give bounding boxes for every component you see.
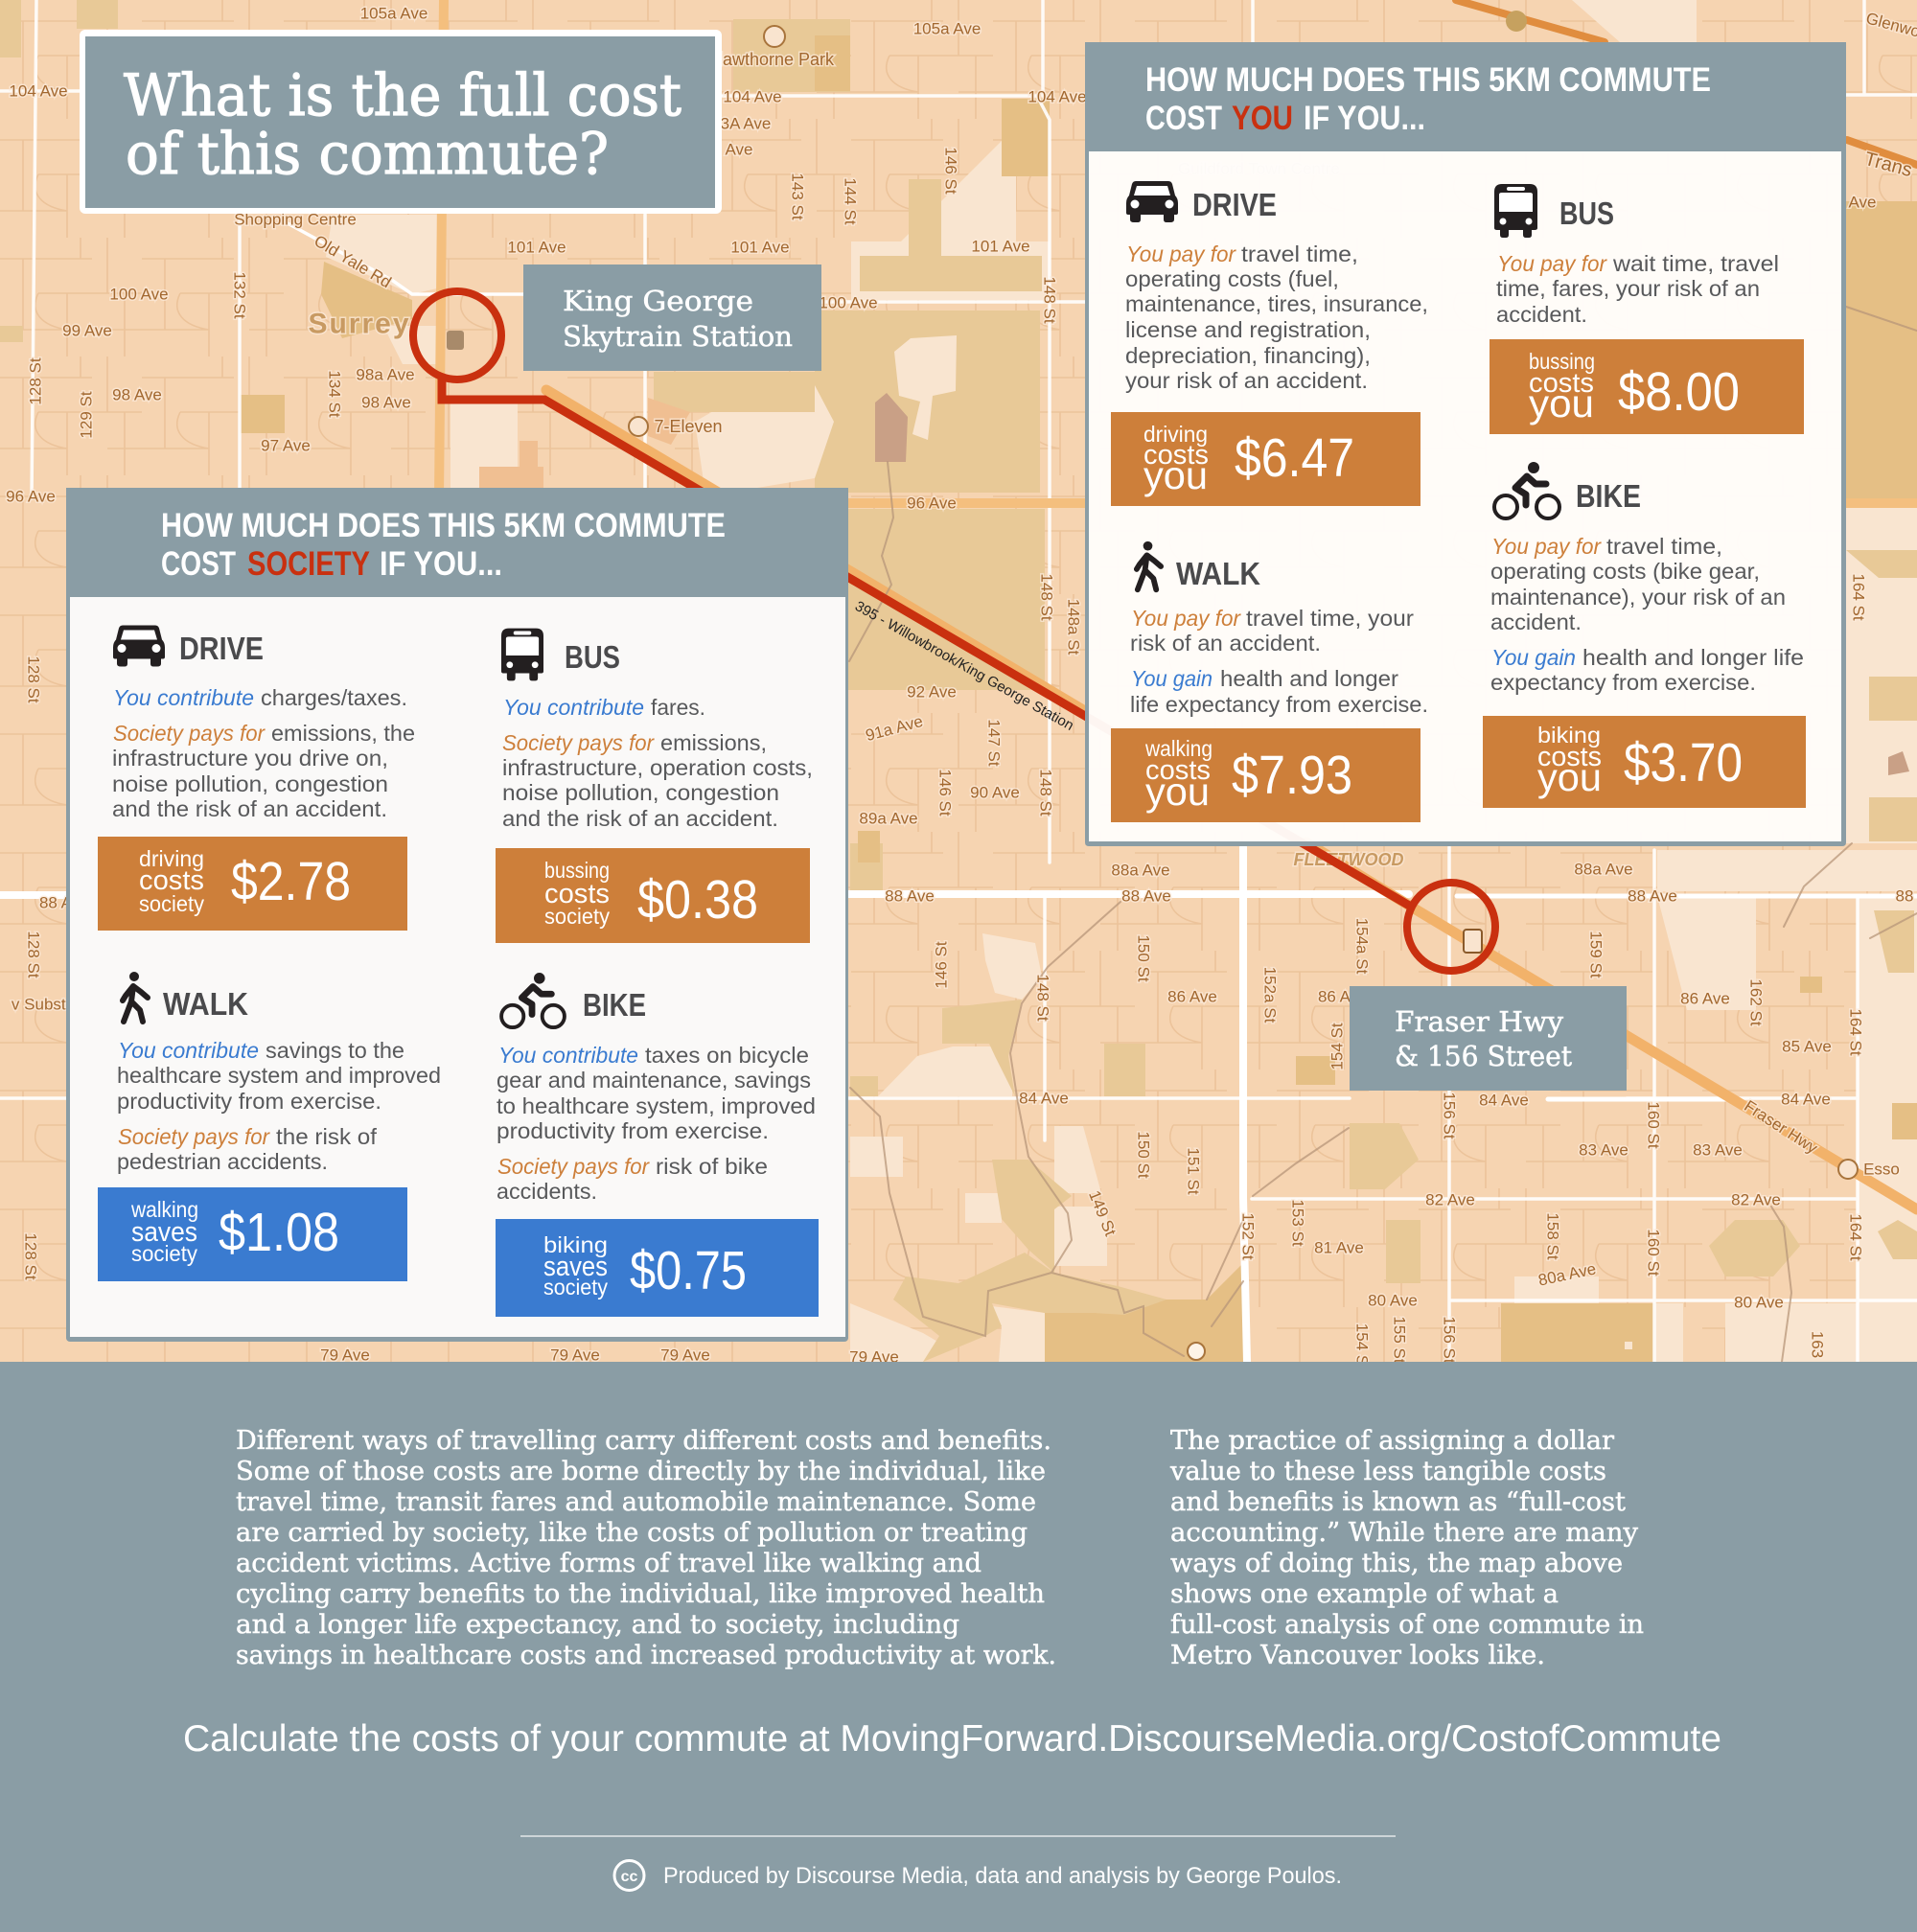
map labels: 154 S xyxy=(1353,1323,1371,1366)
explanatory text: left column: are carried by society, like the costs of pollution or treating xyxy=(236,1518,1028,1548)
label: Fraser Hwy and 156 Street xyxy=(1350,986,1627,1091)
you: drive: operating costs (fuel, xyxy=(1125,266,1339,291)
map labels: 98 Ave xyxy=(361,393,411,412)
map labels: 153 St xyxy=(1288,1199,1307,1247)
map labels: 156 St xyxy=(1440,1092,1459,1139)
society: bus: BUS xyxy=(565,639,620,675)
society: walk: Society pays for xyxy=(118,1124,270,1149)
heading: society xyxy=(161,507,726,583)
map labels: 144 St xyxy=(842,177,859,225)
start marker circle xyxy=(413,291,501,380)
map labels: 160 St xyxy=(1645,1101,1662,1149)
map labels: 148 St xyxy=(1041,276,1058,324)
you: bus: BUS xyxy=(1559,196,1614,231)
explanatory text: left column: and a longer life expectancy, and to society, including xyxy=(236,1610,959,1640)
society: bus: Society pays for xyxy=(502,730,655,755)
map labels: 100 Ave xyxy=(109,286,169,303)
map labels: 159 St xyxy=(1587,931,1605,978)
map labels: Ave xyxy=(1848,194,1877,211)
you: walk: You pay for xyxy=(1131,606,1241,631)
map labels: 80 Ave xyxy=(311,1294,360,1313)
map labels: 96 Ave xyxy=(907,494,957,512)
panel: cost to society xyxy=(66,488,848,1342)
label: Fraser Hwy and 156 Street: & 156 Street xyxy=(1395,1040,1572,1072)
you: bike: expectancy from exercise. xyxy=(1490,670,1756,695)
cost box: biking costs you: $3.70 xyxy=(1624,732,1743,794)
map labels: 148 St xyxy=(1037,573,1056,621)
explanatory text: right column: Metro Vancouver looks like. xyxy=(1170,1641,1545,1670)
society: bike: risk of bike xyxy=(656,1154,768,1179)
society: bike: taxes on bicycle xyxy=(645,1043,809,1068)
heading: society: COST xyxy=(161,545,236,583)
map labels: 91a Ave xyxy=(864,712,925,745)
explanatory text: left column: accident victims. Active forms of travel like walking and xyxy=(236,1549,982,1578)
map labels: FLEETWOOD xyxy=(1294,850,1403,869)
map labels: 82 Ave xyxy=(1425,1190,1475,1209)
map labels: Ave xyxy=(725,140,753,159)
explanatory text: left column: cycling carry benefits to the individual, like improved health xyxy=(236,1579,1045,1609)
you: walk: travel time, your xyxy=(1246,606,1414,631)
map labels: 88 Ave xyxy=(1121,887,1171,905)
saving box: biking saves society: saves xyxy=(543,1252,608,1282)
map labels: lawthorne Park xyxy=(719,50,835,69)
map labels: 154a St xyxy=(1353,918,1371,975)
map labels: 164 St xyxy=(1850,573,1867,621)
society: drive: noise pollution, congestion xyxy=(112,771,388,796)
map labels: 151 St xyxy=(1185,1147,1202,1195)
map labels: 84 Ave xyxy=(1479,1091,1529,1110)
society: bus: and the risk of an accident. xyxy=(502,806,778,831)
map labels: 150 St xyxy=(1135,1131,1152,1179)
cost box: driving costs society: society xyxy=(139,891,204,916)
saving box: biking saves society: biking xyxy=(543,1232,608,1257)
cost box: biking costs you: biking xyxy=(1537,723,1601,748)
you: bike xyxy=(1483,462,1806,808)
society: walk: productivity from exercise. xyxy=(117,1089,381,1114)
map labels: Esso xyxy=(1863,1160,1900,1179)
map background xyxy=(0,0,1917,1367)
saving box: biking saves society: $0.75 xyxy=(630,1240,747,1301)
cost box: walking costs you: you xyxy=(1145,770,1210,814)
map labels: 128 St xyxy=(27,357,44,405)
map labels: 89a Ave xyxy=(859,809,918,828)
you: bike: operating costs (bike gear, xyxy=(1490,559,1760,584)
heading: society: HOW MUCH DOES THIS 5KM COMMUTE xyxy=(161,507,726,544)
explanatory text: right column: and benefits is known as “full-cost xyxy=(1170,1487,1626,1517)
map labels: 99 Ave xyxy=(62,322,112,339)
explanatory text: right column: shows one example of what a xyxy=(1170,1579,1559,1609)
map labels: 134 St xyxy=(326,370,343,418)
cost box: bussing costs society: costs xyxy=(544,879,610,909)
map labels: 128 St xyxy=(25,656,42,703)
society: bus xyxy=(496,629,813,943)
you: walk xyxy=(1111,541,1428,822)
map labels: 97 Ave xyxy=(261,437,311,454)
saving box: walking saves society: society xyxy=(131,1241,197,1266)
map labels: Guildford Town Centre xyxy=(1178,159,1340,178)
call to action: Calculate the costs of your commute at MovingForward.DiscourseMedia.org/CostofCommute xyxy=(183,1718,1721,1760)
cost box: driving costs society: driving xyxy=(139,846,204,871)
you: walk: health and longer xyxy=(1220,666,1398,691)
map labels: 83 Ave xyxy=(1693,1140,1743,1160)
you: bus: accident. xyxy=(1496,302,1587,327)
map labels: 85 Ave xyxy=(1782,1037,1832,1056)
map labels: 90 Ave xyxy=(970,784,1020,801)
you: drive xyxy=(1111,181,1428,506)
map labels: 100 Ave xyxy=(819,293,878,312)
title: What is the full cost xyxy=(124,62,681,129)
society: bus: infrastructure, operation costs, xyxy=(502,755,813,780)
title: of this commute? xyxy=(126,121,609,188)
you: bus: wait time, travel xyxy=(1612,251,1779,276)
map labels: 162 St xyxy=(1746,978,1766,1026)
map labels: Old Yale Rd xyxy=(311,232,395,291)
cost box: bussing costs society: bussing xyxy=(544,858,610,883)
cost box: walking costs you: walking xyxy=(1144,736,1213,761)
society: walk xyxy=(98,972,441,1281)
map labels: Trans xyxy=(1862,149,1914,181)
icon: creative commons: cc xyxy=(621,1869,638,1885)
you: drive: license and registration, xyxy=(1125,317,1371,342)
cost box: walking costs you: costs xyxy=(1145,755,1211,786)
you: walk: risk of an accident. xyxy=(1130,631,1321,656)
end marker circle xyxy=(1407,883,1495,971)
cost box: driving costs society: costs xyxy=(139,865,204,896)
map labels: 128 St xyxy=(25,931,42,978)
heading: you xyxy=(1145,61,1711,137)
cost box: walking costs you: $7.93 xyxy=(1232,745,1352,806)
saving box: biking saves society xyxy=(496,1219,819,1317)
society: walk: WALK xyxy=(163,986,248,1022)
map labels: Shopping Centre xyxy=(234,211,357,228)
society: bike: accidents. xyxy=(497,1179,597,1204)
label: King George Skytrain Station: King George xyxy=(563,285,753,317)
you: walk: WALK xyxy=(1176,556,1260,591)
cost box: driving costs society xyxy=(98,837,407,931)
map labels: 98 Ave xyxy=(112,385,162,404)
you: bus: You pay for xyxy=(1497,251,1607,276)
society: walk: the risk of xyxy=(276,1124,378,1149)
map labels: 160 St xyxy=(1645,1229,1662,1276)
map labels: 146 St xyxy=(932,941,951,989)
map labels: 101 Ave xyxy=(971,238,1030,255)
you: drive: DRIVE xyxy=(1192,187,1277,222)
society: bike: Society pays for xyxy=(497,1154,650,1179)
map labels: 128 St xyxy=(21,1232,40,1280)
society: drive: Society pays for xyxy=(113,721,266,746)
society: bike: to healthcare system, improved xyxy=(497,1093,816,1118)
society: walk: pedestrian accidents. xyxy=(117,1149,328,1174)
heading: you: HOW MUCH DOES THIS 5KM COMMUTE xyxy=(1145,61,1711,99)
map labels: 79 Ave xyxy=(660,1346,710,1365)
map labels: 105a Ave xyxy=(360,4,427,23)
map labels: 84 Ave xyxy=(1019,1089,1069,1108)
map labels: 152 St xyxy=(1238,1212,1258,1260)
map labels: 150 St xyxy=(1135,934,1152,982)
label: King George Skytrain Station xyxy=(523,264,821,371)
society: walk: savings to the xyxy=(266,1038,404,1063)
map labels: 101 Ave xyxy=(507,238,566,257)
explanatory text: left column xyxy=(236,1426,1056,1670)
footer band xyxy=(0,1362,1917,1932)
society: bike: BIKE xyxy=(583,987,646,1023)
explanatory text: left column: savings in healthcare costs and increased productivity at work. xyxy=(236,1641,1056,1670)
map labels: 163 xyxy=(1808,1331,1827,1358)
society: drive xyxy=(98,625,415,931)
society: bike: productivity from exercise. xyxy=(497,1118,769,1143)
commute route line xyxy=(442,379,1411,907)
map labels: 88 Ave xyxy=(885,887,935,905)
you: drive: depreciation, financing), xyxy=(1125,343,1371,368)
map labels: 80 Ave xyxy=(109,1294,159,1313)
cost box: driving costs you: you xyxy=(1143,453,1208,497)
society: bus: You contribute xyxy=(503,695,644,720)
explanatory text: right column: ways of doing this, the map above xyxy=(1170,1549,1623,1578)
heading: you: COST xyxy=(1145,100,1222,137)
map labels: 129 St xyxy=(77,391,96,439)
map labels: 88a Ave xyxy=(1111,861,1170,880)
map labels: 96 Ave xyxy=(6,487,56,506)
explanatory text: right column xyxy=(1169,1426,1644,1670)
explanatory text: left column: Different ways of travelling carry different costs and benefits. xyxy=(236,1426,1051,1456)
cost box: driving costs you: costs xyxy=(1143,440,1209,471)
map labels: 155 St xyxy=(1390,1316,1409,1364)
cost box: walking costs you xyxy=(1111,728,1420,822)
map labels: 146 St xyxy=(935,769,955,816)
heading: you: YOU xyxy=(1232,100,1293,137)
society: drive: infrastructure you drive on, xyxy=(112,746,388,770)
society: walk: healthcare system and improved xyxy=(117,1063,441,1088)
society: bike: You contribute xyxy=(498,1043,638,1068)
map labels: v Substa xyxy=(12,995,76,1014)
you: bus: time, fares, your risk of an xyxy=(1496,276,1760,301)
map labels: 154 St xyxy=(1328,1023,1346,1070)
cost box: biking costs you xyxy=(1483,716,1806,808)
society: walk: You contribute xyxy=(118,1038,259,1063)
you: drive: your risk of an accident. xyxy=(1125,368,1368,393)
map labels: 79 Ave xyxy=(550,1346,600,1365)
map labels: 148 St xyxy=(1037,769,1054,816)
you: bike: You pay for xyxy=(1491,534,1602,559)
map labels: Fraser Hwy xyxy=(1741,1096,1821,1158)
map labels: 148 St xyxy=(1033,974,1052,1022)
map labels: 152a St xyxy=(1261,967,1279,1024)
label: Fraser Hwy and 156 Street: Fraser Hwy xyxy=(1395,1005,1564,1038)
map labels: 88 xyxy=(1896,887,1913,905)
map labels: 164 St xyxy=(1846,1008,1865,1056)
label: King George Skytrain Station: Skytrain Station xyxy=(563,320,793,353)
map labels: 149 St xyxy=(1085,1188,1120,1239)
map labels xyxy=(6,4,1917,1367)
cost box: bussing costs you: costs xyxy=(1529,368,1594,399)
map labels: 92 Ave xyxy=(907,682,957,702)
map labels: 143 St xyxy=(788,172,807,220)
cost box: bussing costs you: bussing xyxy=(1529,349,1595,374)
society: drive: emissions, the xyxy=(271,721,415,746)
you: drive: You pay for xyxy=(1126,242,1236,266)
cost box: driving costs you: $6.47 xyxy=(1235,427,1354,489)
map labels: 158 St xyxy=(1543,1212,1562,1260)
society: drive: and the risk of an accident. xyxy=(112,796,387,821)
cost box: bussing costs you: $8.00 xyxy=(1618,361,1740,423)
map labels: 88 Ave xyxy=(1628,887,1677,905)
you: bike: accident. xyxy=(1490,610,1582,634)
map labels: 86 Ave xyxy=(1680,989,1730,1008)
map labels: 7-Eleven xyxy=(654,417,723,436)
explanatory text: right column: accounting.” While there are many xyxy=(1170,1518,1639,1548)
cost box: driving costs you: driving xyxy=(1143,422,1208,447)
map labels: 84 Ave xyxy=(1781,1091,1831,1108)
map labels: 146 St xyxy=(941,147,960,195)
cost box: driving costs you xyxy=(1111,412,1420,506)
map labels: 80a Ave xyxy=(1536,1259,1598,1290)
saving box: walking saves society: walking xyxy=(130,1197,198,1222)
saving box: walking saves society: saves xyxy=(131,1217,197,1248)
you: bike: health and longer life xyxy=(1582,645,1804,670)
map labels: 132 St xyxy=(230,271,249,319)
saving box: biking saves society: society xyxy=(543,1275,608,1300)
map labels: 164 St xyxy=(1846,1213,1865,1261)
you: drive: maintenance, tires, insurance, xyxy=(1125,291,1428,316)
map labels: 156 St xyxy=(1440,1316,1459,1364)
map markers xyxy=(447,11,1858,1360)
heading: society: IF YOU... xyxy=(380,545,502,583)
title xyxy=(80,30,722,214)
map labels: 80 Ave xyxy=(1734,1294,1784,1311)
cost box: driving costs society: $2.78 xyxy=(231,851,351,912)
map labels: 147 St xyxy=(985,719,1003,767)
icon: creative commons xyxy=(614,1861,644,1890)
society: bus: noise pollution, congestion xyxy=(502,780,779,805)
map labels: 79 Ave xyxy=(849,1347,899,1367)
society: bike: gear and maintenance, savings xyxy=(497,1068,811,1092)
society: bus: emissions, xyxy=(660,730,767,755)
map labels: 3A Ave xyxy=(721,115,771,132)
map labels: 79 Ave xyxy=(320,1346,370,1365)
map labels: 88 A xyxy=(39,893,73,912)
heading: society: SOCIETY xyxy=(247,545,370,583)
map labels: 80 Ave xyxy=(1368,1292,1418,1309)
explanatory text: right column: full-cost analysis of one commute in xyxy=(1170,1610,1644,1640)
map labels: 86 A xyxy=(1318,987,1351,1006)
you: bike: travel time, xyxy=(1606,534,1722,559)
map labels: 101 Ave xyxy=(730,238,790,257)
cost box: bussing costs society: society xyxy=(544,904,610,929)
society: bus: fares. xyxy=(651,695,705,720)
you: bus xyxy=(1490,184,1804,434)
credit: Produced by Discourse Media, data and analysis by George Poulos. xyxy=(663,1863,1342,1889)
panel: cost to you xyxy=(1085,42,1846,846)
society: drive: charges/taxes. xyxy=(261,685,407,710)
map labels: 98a Ave xyxy=(356,366,415,383)
society: bike xyxy=(496,973,819,1317)
you: walk: You gain xyxy=(1131,666,1213,691)
cost box: biking costs you: you xyxy=(1537,755,1602,799)
you: bike: maintenance), your risk of an xyxy=(1490,585,1786,610)
you: bike: BIKE xyxy=(1576,478,1641,514)
map labels: Surrey xyxy=(308,309,411,339)
cost box: bussing costs you xyxy=(1490,339,1804,434)
saving box: walking saves society: $1.08 xyxy=(219,1202,339,1263)
explanatory text: left column: Some of those costs are borne directly by the individual, like xyxy=(236,1457,1046,1486)
cost box: bussing costs you: you xyxy=(1529,381,1594,426)
map labels: 83 Ave xyxy=(1579,1140,1628,1160)
society: drive: You contribute xyxy=(113,685,254,710)
explanatory text: right column: value to these less tangible costs xyxy=(1169,1457,1606,1486)
you: walk: life expectancy from exercise. xyxy=(1130,692,1428,717)
map labels: 148a St xyxy=(1064,599,1083,656)
explanatory text: left column: travel time, transit fares and automobile maintenance. Some xyxy=(236,1487,1036,1517)
map labels: 104 Ave xyxy=(723,88,782,105)
saving box: walking saves society xyxy=(98,1187,407,1281)
cost box: biking costs you: costs xyxy=(1537,742,1602,772)
map labels: 86 Ave xyxy=(1167,987,1217,1006)
map labels: 81 Ave xyxy=(1314,1238,1364,1257)
society: drive: DRIVE xyxy=(179,631,264,666)
map labels: 104 Ave xyxy=(9,82,68,100)
route label: 395 - Willowbrook/King George Station xyxy=(852,598,1076,734)
map labels: 88a Ave xyxy=(1574,861,1633,878)
cost box: bussing costs society: $0.38 xyxy=(637,869,758,931)
map labels: 104 Ave xyxy=(1028,88,1087,105)
map labels: 105a Ave xyxy=(913,19,981,38)
explanatory text: right column: The practice of assigning a dollar xyxy=(1170,1426,1614,1456)
map labels: 82 Ave xyxy=(1731,1190,1781,1209)
cost box: bussing costs society xyxy=(496,848,810,943)
roads xyxy=(0,0,1917,1362)
you: bike: You gain xyxy=(1491,645,1576,670)
heading: you: IF YOU... xyxy=(1304,100,1425,137)
you: drive: travel time, xyxy=(1241,242,1358,266)
